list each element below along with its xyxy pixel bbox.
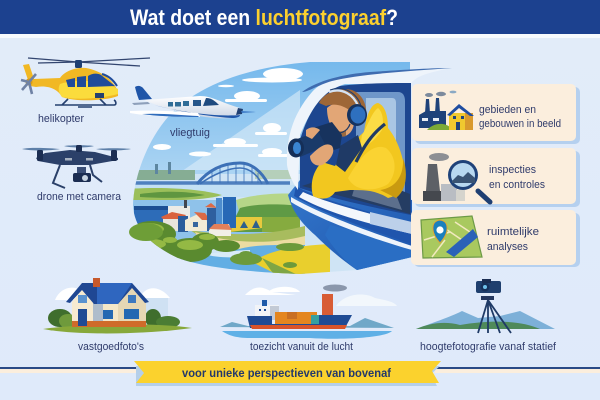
label: vliegtuig: vliegtuig <box>170 127 210 139</box>
label: vastgoedfoto's: vastgoedfoto's <box>78 341 144 353</box>
sky light beam <box>184 90 300 170</box>
card: ruimtelijke analyses: ruimtelijke <box>487 226 539 238</box>
label: toezicht vanuit de lucht: toezicht vanuit de lucht <box>250 341 353 353</box>
banner lines <box>0 367 600 373</box>
hair <box>319 89 366 120</box>
card: inspecties en controles: en controles <box>489 179 545 191</box>
face <box>327 103 355 136</box>
ground and water <box>136 174 410 272</box>
icon: house <box>43 278 192 333</box>
title: Wat doet een luchtfotograaf? <box>130 5 398 30</box>
icon: camera on tripod <box>416 279 555 333</box>
cabin dark <box>302 180 410 214</box>
field <box>230 217 262 232</box>
photographer <box>288 88 406 199</box>
icon: small plane <box>130 86 256 118</box>
headband <box>329 90 358 106</box>
buildings <box>134 210 168 224</box>
card: ruimtelijke analyses <box>411 210 580 267</box>
dark frame <box>300 83 411 215</box>
central scene: aerial landscape <box>125 60 415 279</box>
icon: chimney and magnifier <box>423 153 490 202</box>
icon: container ship <box>220 284 397 339</box>
icon: map with pin <box>421 216 482 258</box>
white frame <box>287 68 452 190</box>
card: gebieden en gebouwen: gebouwen in beeld <box>479 118 561 130</box>
thin hull stripe <box>291 197 412 250</box>
label: helikopter: helikopter <box>38 113 84 125</box>
card: gebieden en gebouwen: gebieden en <box>479 104 536 116</box>
inner collar and strap <box>336 135 362 172</box>
hands <box>306 127 320 139</box>
bridge <box>135 163 290 184</box>
icon: drone <box>22 145 131 188</box>
label: hoogtefotografie vanaf statief: hoogtefotografie vanaf statief <box>420 341 557 353</box>
banner: voor unieke perspectieven van bovenaf <box>182 366 392 380</box>
plane window and body <box>287 68 452 270</box>
jacket <box>312 103 405 199</box>
clouds <box>153 68 303 157</box>
icon: factory and house <box>419 91 474 130</box>
earphone <box>347 104 367 126</box>
label: drone met camera: drone met camera <box>37 191 122 203</box>
card: gebieden en gebouwen <box>412 84 580 144</box>
white sill <box>299 192 412 234</box>
card: inspecties en controles <box>412 148 580 207</box>
card: inspecties en controles: inspecties <box>489 164 536 176</box>
camera <box>313 122 342 152</box>
banner <box>134 361 441 386</box>
hull <box>288 180 412 270</box>
river bottom <box>180 245 305 274</box>
trees overhang <box>129 223 163 241</box>
icon: helicopter <box>21 58 150 107</box>
trees front <box>128 221 240 262</box>
header band <box>0 0 600 38</box>
window interior <box>356 92 405 200</box>
card: ruimtelijke analyses: analyses <box>487 241 528 253</box>
yellow fields <box>252 244 330 276</box>
